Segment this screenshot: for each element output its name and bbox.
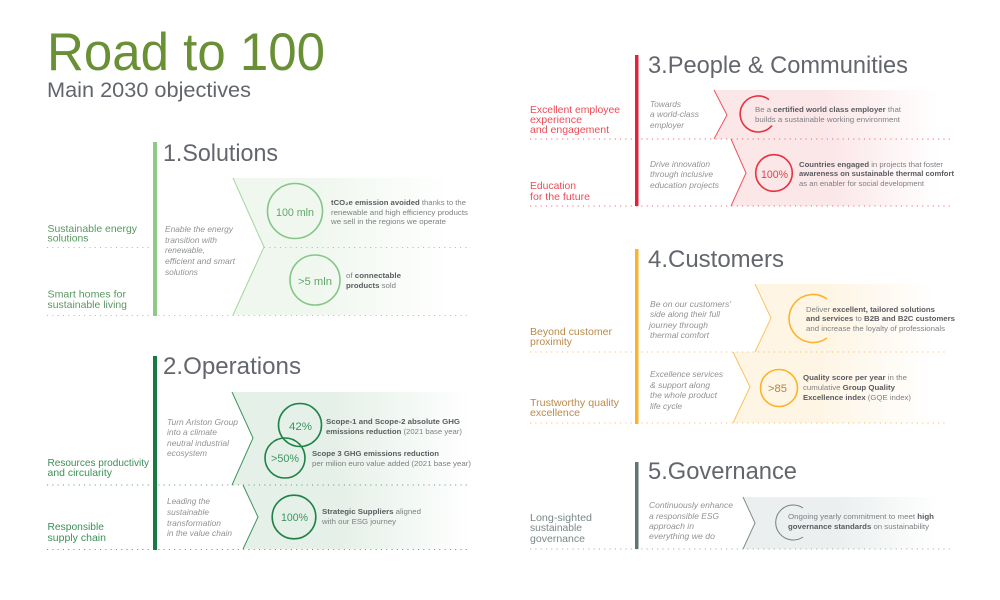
chevron outlines [232, 392, 258, 549]
target: 100% countries: as an enabler for social development [799, 179, 925, 188]
upper chevron background [714, 90, 950, 139]
panel: 3 People and Communities [530, 52, 955, 206]
chevron outlines [714, 90, 746, 206]
target: 50%: >50% [271, 453, 299, 465]
italic descriptions: side along their full [650, 309, 721, 319]
target: 100% suppliers [272, 495, 421, 539]
target: quality score: Excellence index (GQE index) [803, 393, 912, 402]
italic descriptions: sustainable [167, 507, 209, 517]
target: 100 mln [268, 184, 468, 238]
area labels: Trustworthy quality [530, 398, 620, 409]
italic description: everything we do [649, 531, 715, 541]
target: 100% countries [756, 155, 955, 191]
area labels [530, 327, 620, 419]
italic description [649, 500, 733, 541]
area labels [48, 458, 150, 544]
area labels: and circularity [48, 468, 113, 479]
target: 100% countries: awareness on sustainable thermal comfort [799, 169, 955, 178]
italic descriptions: Excellence services [650, 369, 724, 379]
dotted row line [530, 548, 950, 550]
area label: sustainable [530, 523, 582, 534]
target: tailored solutions: Deliver excellent, tailored solutions [806, 305, 935, 314]
target: tailored solutions: and increase the loyalty of professionals [806, 324, 945, 333]
italic descriptions: & support along [650, 380, 710, 390]
area labels [48, 224, 138, 311]
upper chevron background [755, 284, 950, 352]
title: Road to 100 [47, 23, 325, 82]
target: 5 mln: products sold [346, 281, 396, 290]
area labels: experience [530, 115, 582, 126]
area labels: Education [530, 181, 576, 192]
panel: 5 Governance [530, 458, 950, 549]
target: governance standards: Ongoing yearly commitment to meet high [788, 512, 934, 521]
target: quality score [760, 370, 912, 406]
target: 5 mln [290, 255, 401, 305]
italic descriptions: through inclusive [650, 169, 713, 179]
italic description: solutions [165, 267, 199, 277]
area labels: sustainable living [48, 300, 127, 311]
italic descriptions: neutral industrial [167, 438, 230, 448]
panel: 1 Solutions [47, 140, 471, 316]
italic descriptions: Leading the [167, 496, 210, 506]
target: 50%: per milion euro value added (2021 base year) [312, 459, 472, 468]
chevron outline [743, 497, 755, 549]
chevron outlines [733, 284, 771, 423]
italic description: approach in [649, 521, 694, 531]
area labels: supply chain [48, 533, 106, 544]
area labels: Sustainable energy [48, 224, 138, 235]
italic description: Continuously enhance [649, 500, 733, 510]
area label: Long-sighted [530, 513, 592, 524]
italic description [165, 224, 236, 277]
target: 100 mln: renewable and high efficiency products [331, 208, 468, 217]
area labels: Beyond customer [530, 327, 613, 338]
target: 42%: Scope-1 and Scope-2 absolute GHG [326, 417, 460, 426]
area labels: Responsible [48, 522, 104, 533]
target: 100 mln: we sell in the regions we operate [330, 217, 446, 226]
section bar [153, 142, 157, 316]
heading: 5.Governance [648, 458, 797, 485]
italic descriptions: ecosystem [167, 448, 207, 458]
italic descriptions: the whole product [650, 390, 718, 400]
section bar [635, 55, 638, 206]
italic descriptions: Towards [650, 99, 682, 109]
heading: 3.People & Communities [648, 52, 908, 79]
italic descriptions: education projects [650, 180, 720, 190]
area label: governance [530, 534, 585, 545]
italic descriptions [648, 299, 731, 411]
dotted row lines [47, 248, 471, 316]
heading: 4.Customers [648, 246, 784, 273]
target: 50%: Scope 3 GHG emissions reduction [312, 449, 439, 458]
target: governance standards: governance standards on sustainability [788, 522, 929, 531]
area labels [530, 105, 620, 203]
italic descriptions: transformation [167, 518, 221, 528]
italic description: renewable, [165, 245, 205, 255]
lower chevron background [733, 352, 950, 423]
target: 42%: 42% [289, 421, 312, 433]
panel: 4 Customers [530, 246, 955, 424]
italic description: a responsible ESG [649, 511, 719, 521]
lower chevron background [243, 485, 471, 549]
target: quality score: Quality score per year in the [803, 373, 907, 382]
target: certified employer: Be a certified world class employer that [755, 105, 902, 114]
target: 100% countries: Countries engaged in projects that foster [799, 160, 944, 169]
italic descriptions: in the value chain [167, 528, 232, 538]
area labels: Excellent employee [530, 105, 620, 116]
area labels: proximity [530, 337, 573, 348]
target: quality score: >85 [768, 383, 787, 395]
section bar [635, 462, 638, 549]
area labels: solutions [48, 234, 88, 244]
italic descriptions: into a climate [167, 427, 217, 437]
chevron outline [233, 178, 264, 315]
italic descriptions: a world-class [650, 109, 700, 119]
italic descriptions: journey through [648, 320, 708, 330]
section bar [635, 249, 638, 424]
heading: 2.Operations [163, 353, 301, 380]
lower chevron background [731, 139, 950, 206]
target: 100% suppliers: Strategic Suppliers aligned [322, 507, 421, 516]
target: 100% suppliers: with our ESG journey [321, 517, 396, 526]
subtitle: Main 2030 objectives [47, 77, 251, 102]
target: quality score: cumulative Group Quality [803, 383, 896, 392]
dotted row lines [530, 352, 948, 423]
target: certified employer [740, 96, 902, 132]
target: tailored solutions: and services to B2B and B2C customers [806, 314, 955, 323]
panel: 2 Operations [47, 353, 472, 550]
area labels: excellence [530, 408, 580, 419]
target: 50% [265, 438, 472, 478]
italic descriptions [650, 99, 720, 190]
area labels: and engagement [530, 125, 609, 136]
italic description: efficient and smart [165, 256, 236, 266]
target: 5 mln: >5 mln [298, 276, 332, 288]
target: governance standards [776, 505, 934, 540]
area label [530, 513, 592, 545]
dotted row lines [47, 485, 471, 550]
target: 100 mln: 100 mln [276, 207, 314, 219]
italic descriptions [167, 417, 238, 538]
italic descriptions: life cycle [650, 401, 682, 411]
chevron background [743, 497, 950, 549]
italic description: transition with [165, 235, 217, 245]
target: 100% countries: 100% [761, 169, 788, 181]
italic descriptions: Drive innovation [650, 159, 710, 169]
target: 42%: emissions reduction (2021 base year) [326, 427, 463, 436]
target: 42% [278, 404, 463, 446]
dotted row lines [530, 139, 950, 206]
italic description: Enable the energy [165, 224, 234, 234]
italic descriptions: thermal comfort [650, 330, 710, 340]
area labels: Smart homes for [48, 290, 127, 300]
target: 5 mln: of connectable [346, 271, 401, 280]
gradient chevron background [233, 178, 470, 315]
heading: 1.Solutions [163, 140, 278, 167]
upper chevron background [232, 392, 471, 485]
target: 100% suppliers: 100% [281, 512, 308, 524]
italic descriptions: Turn Ariston Group [167, 417, 238, 427]
area labels: Resources productivity [48, 458, 150, 469]
section bar [153, 356, 157, 550]
target: certified employer: builds a sustainable working environment [755, 115, 901, 124]
italic descriptions: Be on our customers' [650, 299, 731, 309]
target: 100 mln: tCO₂e emission avoided thanks to the [331, 198, 466, 207]
italic descriptions: employer [650, 120, 685, 130]
target: tailored solutions [789, 294, 955, 342]
area labels: for the future [530, 192, 590, 203]
